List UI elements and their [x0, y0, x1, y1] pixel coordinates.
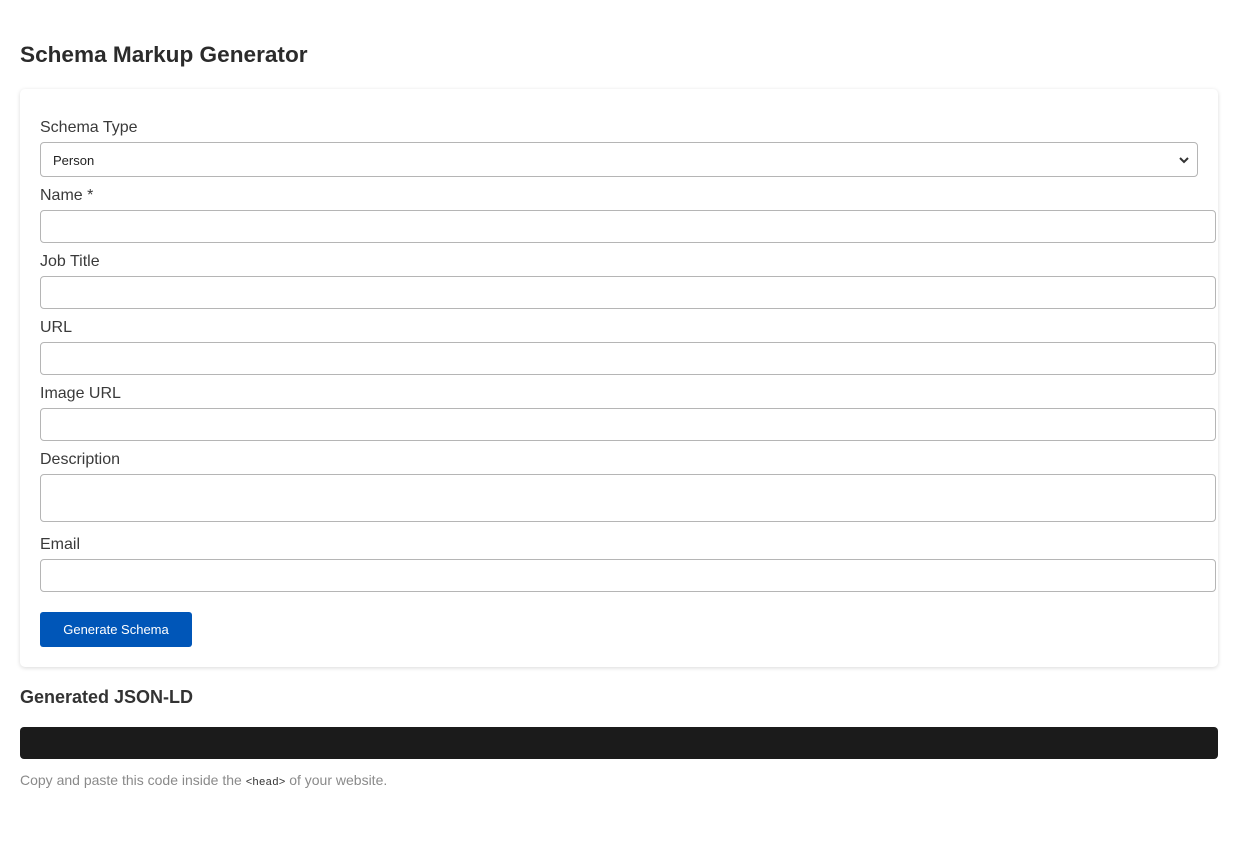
textarea: description	[40, 474, 1216, 522]
select: person: Person	[53, 153, 94, 168]
title: Schema Markup Generator	[20, 42, 308, 67]
label: schema type: Schema Type	[40, 119, 138, 136]
input: image url	[40, 408, 1216, 441]
label: name: Name *	[40, 187, 93, 204]
label: email: Email	[40, 536, 80, 553]
input: job title	[40, 276, 1216, 309]
label: job title: Job Title	[40, 253, 100, 270]
input: url	[40, 342, 1216, 375]
button: generate schema: Generate Schema	[63, 622, 169, 637]
input: email	[40, 559, 1216, 592]
label: description: Description	[40, 451, 120, 468]
input: name	[40, 210, 1216, 243]
panel: form card	[20, 89, 1218, 667]
note text: Copy and paste this code inside the <head> of your website.	[20, 772, 387, 789]
button: generate schema	[40, 612, 192, 647]
label: url: URL	[40, 319, 72, 336]
heading: generated json-ld: Generated JSON-LD	[20, 687, 193, 707]
code output box	[20, 727, 1218, 759]
select: person	[40, 142, 1198, 177]
label: image url: Image URL	[40, 385, 121, 402]
